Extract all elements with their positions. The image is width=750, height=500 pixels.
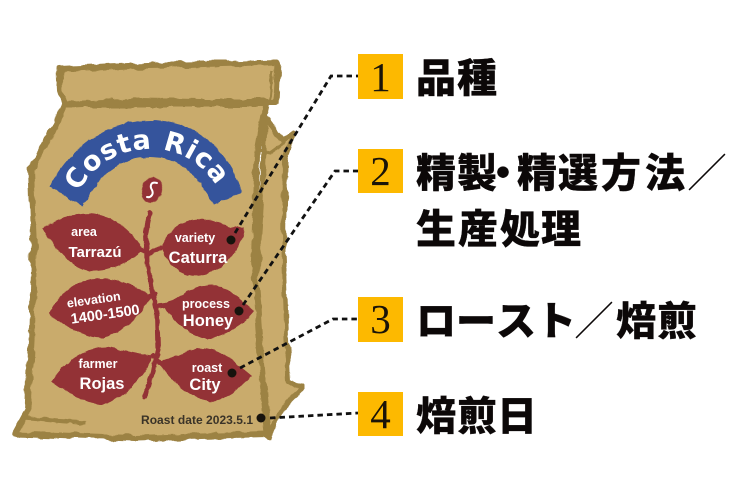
leaf: area	[43, 214, 143, 271]
bag front panel	[15, 104, 268, 438]
roast date: Roast date 2023.5.1	[141, 413, 253, 427]
coffee bean	[138, 175, 166, 205]
leaf: area: Tarrazú	[68, 244, 122, 261]
bag side gusset	[255, 118, 302, 436]
leaf: elevation	[49, 278, 151, 338]
leaf: variety: Caturra	[169, 249, 228, 267]
leader dots	[226, 236, 266, 422]
leaf: process	[163, 285, 254, 339]
item 2: ／	[687, 152, 727, 196]
leaf: farmer	[52, 347, 153, 405]
arc banner	[50, 120, 242, 207]
leaf: farmer: Rojas	[80, 375, 124, 393]
leaf: roast: roast	[192, 361, 223, 375]
item 1: 品種	[416, 57, 497, 101]
leaf: variety: variety	[175, 231, 215, 245]
item 1	[358, 54, 497, 101]
leader lines	[235, 76, 358, 418]
leaf: process: process	[182, 297, 230, 311]
item 3: 3	[370, 296, 391, 342]
leaf: area: area	[71, 225, 98, 239]
item 2: 生産処理	[416, 208, 581, 252]
leaf: roast	[158, 348, 252, 401]
bag folded top	[59, 62, 278, 105]
plant stem	[138, 212, 165, 397]
bag fold details	[22, 70, 285, 423]
leaf: variety	[161, 219, 245, 276]
item 3	[358, 296, 697, 344]
item 4	[358, 391, 537, 439]
item 2: 2	[370, 148, 391, 194]
item 4: 焙煎日	[416, 395, 537, 439]
leaf: elevation: 1400-1500	[70, 302, 141, 328]
item 3: ／	[574, 300, 614, 344]
item 2: 精製・精選方法	[416, 152, 685, 196]
item 3: 焙煎	[616, 300, 697, 344]
item 4: 4	[370, 391, 391, 437]
item 1: 1	[370, 54, 391, 100]
coffee bag illustration	[12, 60, 304, 442]
leaf: process: Honey	[183, 312, 234, 330]
leaf: elevation: elevation	[66, 289, 122, 311]
item 2	[358, 148, 727, 252]
leaf: roast: City	[189, 376, 221, 394]
item 3: ロースト	[416, 300, 576, 344]
leaf: farmer: farmer	[79, 357, 118, 371]
banner title: Costa Rica	[66, 130, 225, 187]
